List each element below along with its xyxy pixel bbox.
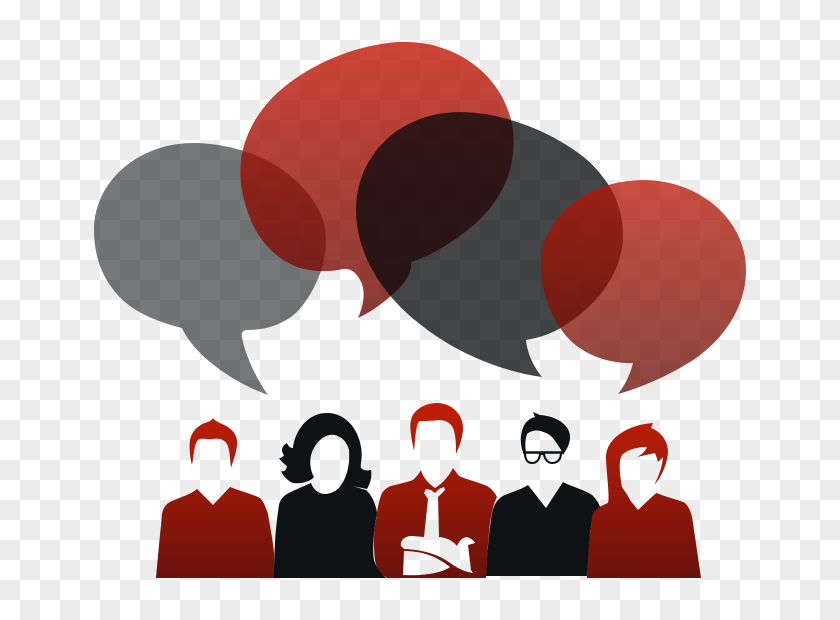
person 2: black woman with curled hair xyxy=(274,413,386,578)
person 4: black man with glasses xyxy=(486,412,600,576)
speech bubble: red right xyxy=(541,180,746,394)
person 5: red woman with side-swept hair xyxy=(587,423,701,578)
icon: glasses xyxy=(523,452,563,463)
speech bubble: grey left xyxy=(94,143,326,395)
speech bubble: red top centre xyxy=(240,42,514,318)
speech bubble: dark centre xyxy=(356,112,623,377)
person 3: red man with tie and crossed arms xyxy=(374,403,497,578)
person 1: red man xyxy=(156,418,274,578)
